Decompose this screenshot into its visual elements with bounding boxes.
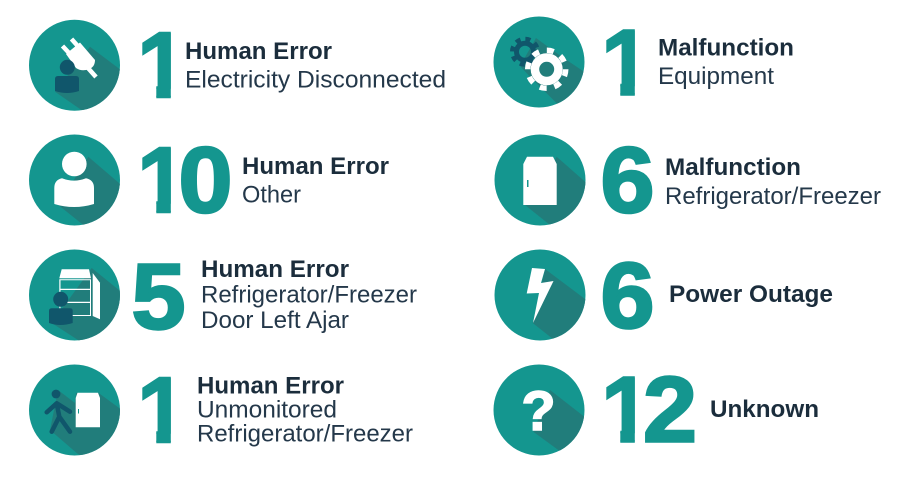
text: unknown: Unknown bbox=[710, 396, 819, 423]
text: power outage: Power Outage bbox=[669, 281, 833, 308]
text: human error other bbox=[242, 153, 389, 208]
icon: lightning bolt bbox=[494, 250, 586, 340]
text: human error door left ajar: Human Error bbox=[201, 256, 349, 283]
icon: person walking from refrigerator bbox=[29, 364, 120, 456]
number: 1: 1 bbox=[137, 358, 189, 462]
number: 6: 6 bbox=[600, 129, 655, 232]
icon: question mark bbox=[494, 364, 584, 456]
text: malfunction equipment: Malfunction bbox=[658, 34, 794, 62]
text: human error unmonitored refrigerator: Unmonitored bbox=[197, 396, 337, 424]
text: human error electricity disconnected bbox=[185, 38, 446, 94]
icon: refrigerator bbox=[494, 134, 586, 226]
text: human error door left ajar: Door Left Ajar bbox=[201, 307, 349, 334]
text: human error unmonitored refrigerator: Human Error bbox=[197, 372, 344, 400]
icon: plug and person bbox=[29, 20, 120, 111]
text: human error unmonitored refrigerator bbox=[197, 372, 413, 448]
text: human error door left ajar: Refrigerator/Freezer bbox=[201, 282, 417, 308]
text: malfunction refrigerator bbox=[665, 154, 881, 210]
text: malfunction refrigerator: Malfunction bbox=[665, 154, 801, 181]
text: human error door left ajar bbox=[201, 256, 417, 334]
text: human error electricity disconnected: Human Error bbox=[185, 38, 332, 65]
icon: gears bbox=[494, 16, 584, 108]
number: 12 first digit: 1 bbox=[601, 358, 653, 462]
icon: question mark: ? bbox=[521, 379, 556, 442]
number: 5: 5 bbox=[132, 246, 186, 349]
text: malfunction refrigerator: Refrigerator/Freezer bbox=[665, 183, 881, 210]
number: 1: 1 bbox=[601, 10, 653, 114]
number: 6: 6 bbox=[600, 245, 655, 348]
text: human error electricity disconnected: Electricity Disconnected bbox=[185, 66, 446, 94]
icon: open refrigerator and person bbox=[29, 250, 120, 340]
text: human error unmonitored refrigerator: Refrigerator/Freezer bbox=[197, 420, 413, 448]
text: human error other: Other bbox=[242, 182, 301, 208]
icon: person bbox=[29, 134, 120, 226]
number: 10 second digit: 0 bbox=[178, 129, 233, 232]
number: 10 first digit: 1 bbox=[137, 128, 189, 232]
number: 12 second digit: 2 bbox=[643, 359, 697, 462]
text: malfunction equipment bbox=[658, 34, 794, 90]
text: human error other: Human Error bbox=[242, 153, 389, 180]
number: 1: 1 bbox=[137, 13, 189, 117]
text: malfunction equipment: Equipment bbox=[658, 63, 774, 90]
